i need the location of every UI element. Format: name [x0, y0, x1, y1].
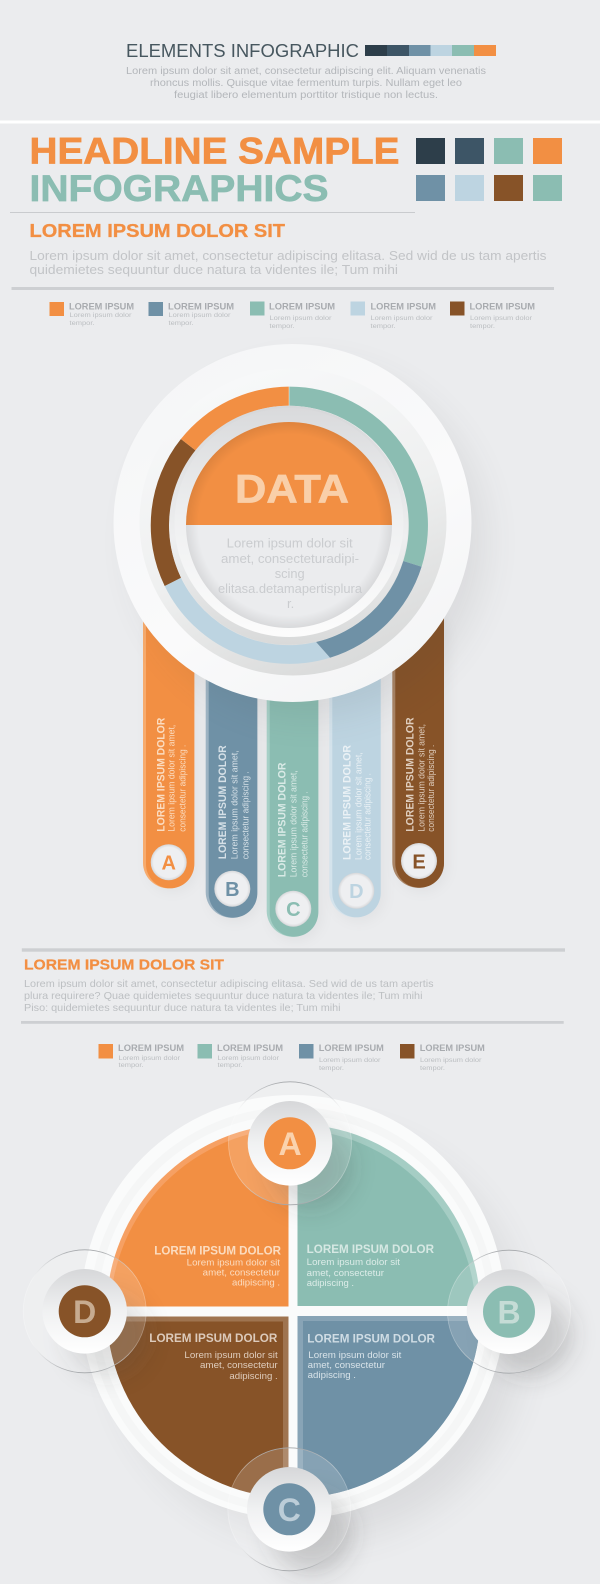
- blue quadrant text: amet, consectetur: [308, 1360, 385, 1371]
- legend item orange: LOREM IPSUM: [118, 1043, 184, 1053]
- legend item green: tempor.: [218, 1062, 243, 1069]
- legend item blue: LOREM IPSUM: [168, 302, 234, 312]
- section two paragraph: Lorem ipsum dolor sit amet, consectetur adipiscing elitasa. Sed wid de us tam apertis: [24, 978, 434, 990]
- orange quadrant text: Lorem ipsum dolor sit: [187, 1258, 280, 1269]
- legend item brown: Lorem ipsum dolor: [470, 315, 533, 322]
- top title: ELEMENTS INFOGRAPHIC: [126, 41, 359, 61]
- legend item brown: [450, 302, 535, 330]
- segment blue: [316, 561, 422, 658]
- pills group: [143, 590, 448, 941]
- section two paragraph: plura requirere? Quae quidemietes sequuntur duce natura ta videntes ile; Tum mihi: [24, 990, 423, 1002]
- green quadrant text: LOREM IPSUM DOLOR: [307, 1244, 435, 1256]
- legend two: [98, 1043, 485, 1072]
- segment green: [289, 387, 428, 567]
- orange quadrant text: amet, consectetur: [203, 1268, 280, 1279]
- centre text: Lorem ipsum dolor sit: [227, 536, 353, 550]
- header intro text: rhoncus mollis. Quisque vitae fermentum turpis. Nullam eget leo: [150, 78, 462, 89]
- legend item blue: tempor.: [168, 320, 194, 327]
- gradient plate: [140, 368, 446, 676]
- blue quadrant text: Lorem ipsum dolor sit: [308, 1350, 402, 1361]
- quadrant blue: [298, 1316, 478, 1494]
- centre text: [218, 536, 363, 611]
- badge A: A: [278, 1126, 302, 1162]
- legend item green: [250, 302, 335, 330]
- pill D: consectetur adipiscing .: [363, 773, 373, 860]
- legend item blue: [148, 302, 234, 327]
- badge C: [228, 1448, 351, 1571]
- section one heading: LOREM IPSUM DOLOR SIT: [30, 221, 285, 241]
- centre text: scing: [275, 566, 305, 581]
- legend item light blue: LOREM IPSUM: [370, 302, 436, 312]
- header block: [126, 41, 496, 101]
- pill E: Lorem ipsum dolor sit amet,: [417, 724, 427, 832]
- section two heading: LOREM IPSUM DOLOR SIT: [24, 956, 224, 974]
- legend item green: LOREM IPSUM: [217, 1043, 283, 1053]
- brown quadrant text: Lorem ipsum dolor sit: [184, 1350, 278, 1361]
- legend one: [50, 302, 535, 330]
- badge A: [228, 1082, 352, 1205]
- pill D: LOREM IPSUM DOLOR: [341, 745, 353, 860]
- legend item brown: LOREM IPSUM: [420, 1043, 485, 1053]
- pill E: E: [412, 852, 426, 874]
- section two paragraph: Piso: quidemietes sequuntur duce natura ta videntes ile; Tum mihi: [24, 1002, 341, 1014]
- pill C: Lorem ipsum dolor sit amet,: [289, 770, 299, 877]
- legend item blue: tempor.: [319, 1065, 344, 1072]
- centre text: r.: [287, 596, 294, 611]
- legend item light blue: [350, 302, 436, 330]
- pill E: LOREM IPSUM DOLOR: [404, 717, 416, 832]
- badge C: C: [278, 1492, 301, 1528]
- pill E: [392, 590, 448, 892]
- quadrant orange: [110, 1129, 288, 1306]
- legend item orange: tempor.: [118, 1062, 144, 1069]
- legend item orange: Lorem ipsum dolor: [70, 312, 132, 319]
- pill B: [206, 620, 261, 922]
- legend item orange: tempor.: [70, 320, 95, 327]
- legend item light blue: Lorem ipsum dolor: [370, 315, 433, 322]
- legend item orange: Lorem ipsum dolor: [118, 1055, 181, 1062]
- header intro text: feugiat libero elementum porttitor tristique non lectus.: [174, 90, 438, 101]
- legend item blue: Lorem ipsum dolor: [168, 312, 231, 319]
- section one paragraph: quidemietes sequuntur duce natura ta videntes ile; Tum mihi: [30, 262, 398, 277]
- section one paragraph: [30, 248, 547, 277]
- badge B: [448, 1250, 570, 1373]
- quadrant brown: [110, 1316, 288, 1493]
- pill A: [143, 590, 198, 892]
- pill C: consectetur adipiscing .: [299, 791, 309, 877]
- legend item brown: LOREM IPSUM: [470, 302, 535, 312]
- green quadrant text: [307, 1244, 435, 1289]
- pill B: B: [225, 879, 240, 901]
- badge B: B: [497, 1294, 521, 1330]
- legend item green: tempor.: [270, 323, 295, 330]
- pill A: A: [161, 852, 176, 874]
- badge D: D: [73, 1294, 96, 1330]
- brown quadrant text: LOREM IPSUM DOLOR: [149, 1333, 278, 1345]
- colour strip: [365, 45, 496, 56]
- legend item blue: Lorem ipsum dolor: [319, 1057, 381, 1064]
- legend item orange: LOREM IPSUM: [69, 302, 134, 312]
- centre text: amet, consecteturadipi-: [221, 551, 359, 566]
- green quadrant text: adipiscing .: [307, 1278, 354, 1289]
- legend item brown: tempor.: [420, 1065, 445, 1072]
- quadrant chart: [23, 1082, 571, 1573]
- section two paragraph: [24, 978, 434, 1014]
- brown quadrant text: adipiscing .: [229, 1371, 278, 1382]
- pill A: consectetur adipiscing .: [177, 745, 187, 832]
- blue quadrant text: [307, 1333, 436, 1381]
- ring segments: [151, 387, 428, 664]
- header intro text: Lorem ipsum dolor sit amet, consectetur adipiscing elit. Aliquam venenatis: [126, 66, 486, 77]
- brown quadrant text: amet, consectetur: [200, 1360, 278, 1371]
- quadrant green: [298, 1128, 478, 1306]
- orange quadrant text: adipiscing .: [232, 1278, 280, 1289]
- pill A: LOREM IPSUM DOLOR: [155, 718, 167, 832]
- pill B: consectetur adipiscing .: [240, 771, 250, 859]
- outer disc: [114, 344, 472, 702]
- pill C: C: [286, 899, 301, 921]
- legend item light blue: tempor.: [370, 323, 396, 330]
- headline: INFOGRAPHICS: [30, 168, 328, 209]
- pill A: Lorem ipsum dolor sit amet,: [166, 725, 176, 832]
- legend item green: LOREM IPSUM: [269, 302, 335, 312]
- legend item blue: LOREM IPSUM: [319, 1043, 384, 1053]
- pill C: [267, 640, 322, 941]
- pill D: Lorem ipsum dolor sit amet,: [353, 752, 363, 860]
- legend item brown: [400, 1043, 485, 1072]
- centre text: elitasa.detamapertisplura: [218, 581, 363, 596]
- pill B: Lorem ipsum dolor sit amet,: [229, 750, 239, 859]
- legend item green: Lorem ipsum dolor: [270, 315, 332, 322]
- green quadrant text: amet, consectetur: [307, 1268, 384, 1279]
- pill B: LOREM IPSUM DOLOR: [217, 745, 229, 859]
- orange quadrant text: LOREM IPSUM DOLOR: [154, 1245, 282, 1257]
- main donut chart: [114, 344, 486, 718]
- legend item green: [198, 1043, 283, 1069]
- pill D: D: [349, 881, 364, 903]
- pill D: [329, 620, 385, 922]
- headline: [30, 130, 399, 209]
- section one paragraph: Lorem ipsum dolor sit amet, consectetur adipiscing elitasa. Sed wid de us tam apertis: [30, 248, 547, 263]
- header intro text: [126, 66, 486, 101]
- colour swatches: [416, 138, 562, 201]
- badge D: [23, 1250, 146, 1373]
- legend item orange: [98, 1043, 184, 1069]
- legend item blue: [299, 1043, 384, 1072]
- legend item orange: [50, 302, 134, 327]
- blue quadrant text: adipiscing .: [308, 1370, 356, 1381]
- inner plate: [169, 406, 408, 645]
- pill C: LOREM IPSUM DOLOR: [276, 763, 288, 877]
- blue quadrant text: LOREM IPSUM DOLOR: [307, 1333, 436, 1345]
- white divider band: [0, 120, 600, 124]
- segment brown: [151, 439, 196, 586]
- segment light blue: [165, 578, 330, 664]
- white base disc: [81, 1095, 505, 1519]
- legend item green: Lorem ipsum dolor: [218, 1055, 280, 1062]
- orange quadrant text: [154, 1245, 282, 1289]
- legend item brown: tempor.: [470, 323, 495, 330]
- green quadrant text: Lorem ipsum dolor sit: [307, 1257, 400, 1268]
- brown quadrant text: [149, 1333, 278, 1382]
- pill E: consectetur adipiscing .: [426, 745, 436, 832]
- shadows cast by badges: [67, 1127, 571, 1573]
- segment orange: [181, 387, 289, 451]
- legend item brown: Lorem ipsum dolor: [420, 1057, 482, 1064]
- centre disc: [186, 422, 392, 628]
- headline: HEADLINE SAMPLE: [30, 130, 399, 172]
- data label: DATA: [235, 468, 349, 512]
